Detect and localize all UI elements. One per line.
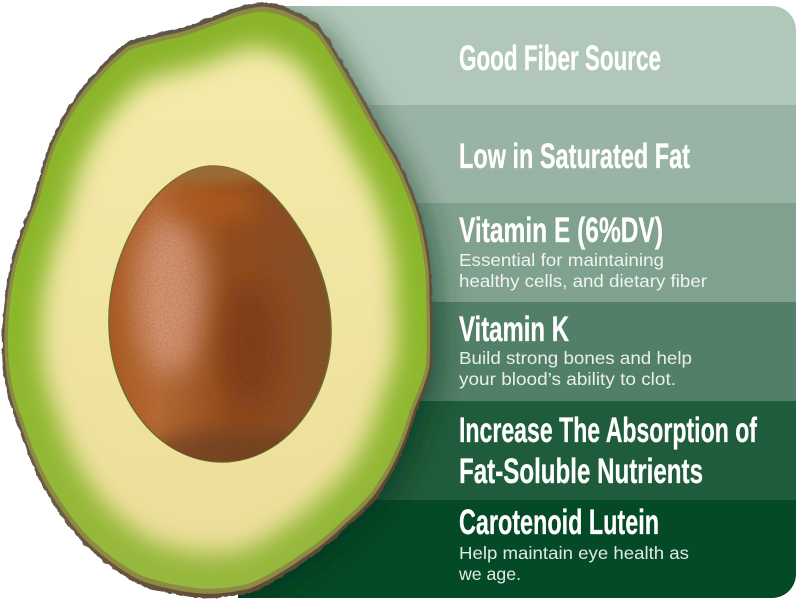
pit dark centre <box>220 280 280 410</box>
heading: Low in Saturated Fat <box>459 137 690 176</box>
item: Increase The Absorption <box>459 411 757 491</box>
item: Vitamin K <box>459 310 692 389</box>
description: Help maintain eye health as <box>459 543 689 563</box>
pit orange crown <box>172 187 256 223</box>
description <box>459 250 707 291</box>
description: your blood’s ability to clot. <box>459 369 676 389</box>
pit highlight <box>136 215 204 375</box>
band 3 background <box>417 203 796 302</box>
heading: Good Fiber Source <box>459 39 661 78</box>
heading: Vitamin E (6%DV) <box>459 211 663 250</box>
description: we age. <box>458 564 521 584</box>
band 5 background <box>376 401 796 500</box>
pit base <box>109 166 331 462</box>
pit top shading <box>170 166 260 186</box>
pit texture <box>110 183 259 436</box>
description <box>459 348 692 389</box>
description <box>458 543 689 584</box>
item: Vitamin E <box>459 211 707 291</box>
avocado skin <box>2 2 433 598</box>
description: Essential for maintaining <box>459 250 664 270</box>
band 6 background <box>200 500 796 598</box>
green outer flesh <box>0 0 440 602</box>
avocado flesh <box>0 0 440 602</box>
heading: Vitamin K <box>459 310 569 349</box>
avocado drop shadow <box>238 6 456 598</box>
description: Build strong bones and help <box>459 348 692 368</box>
pit bottom shading <box>156 422 293 462</box>
avocado half <box>0 0 440 602</box>
cream inner flesh <box>41 47 396 554</box>
item: Carotenoid Lutein <box>458 503 689 584</box>
band 2 background <box>368 105 796 203</box>
band 1 background <box>284 6 796 105</box>
heading: Carotenoid Lutein <box>459 503 659 542</box>
description: healthy cells, and dietary fiber <box>459 271 707 291</box>
band 4 background <box>420 302 796 401</box>
avocado rim <box>4 6 430 594</box>
avocado pit <box>108 160 332 474</box>
panel: nutrient bands <box>238 6 796 598</box>
